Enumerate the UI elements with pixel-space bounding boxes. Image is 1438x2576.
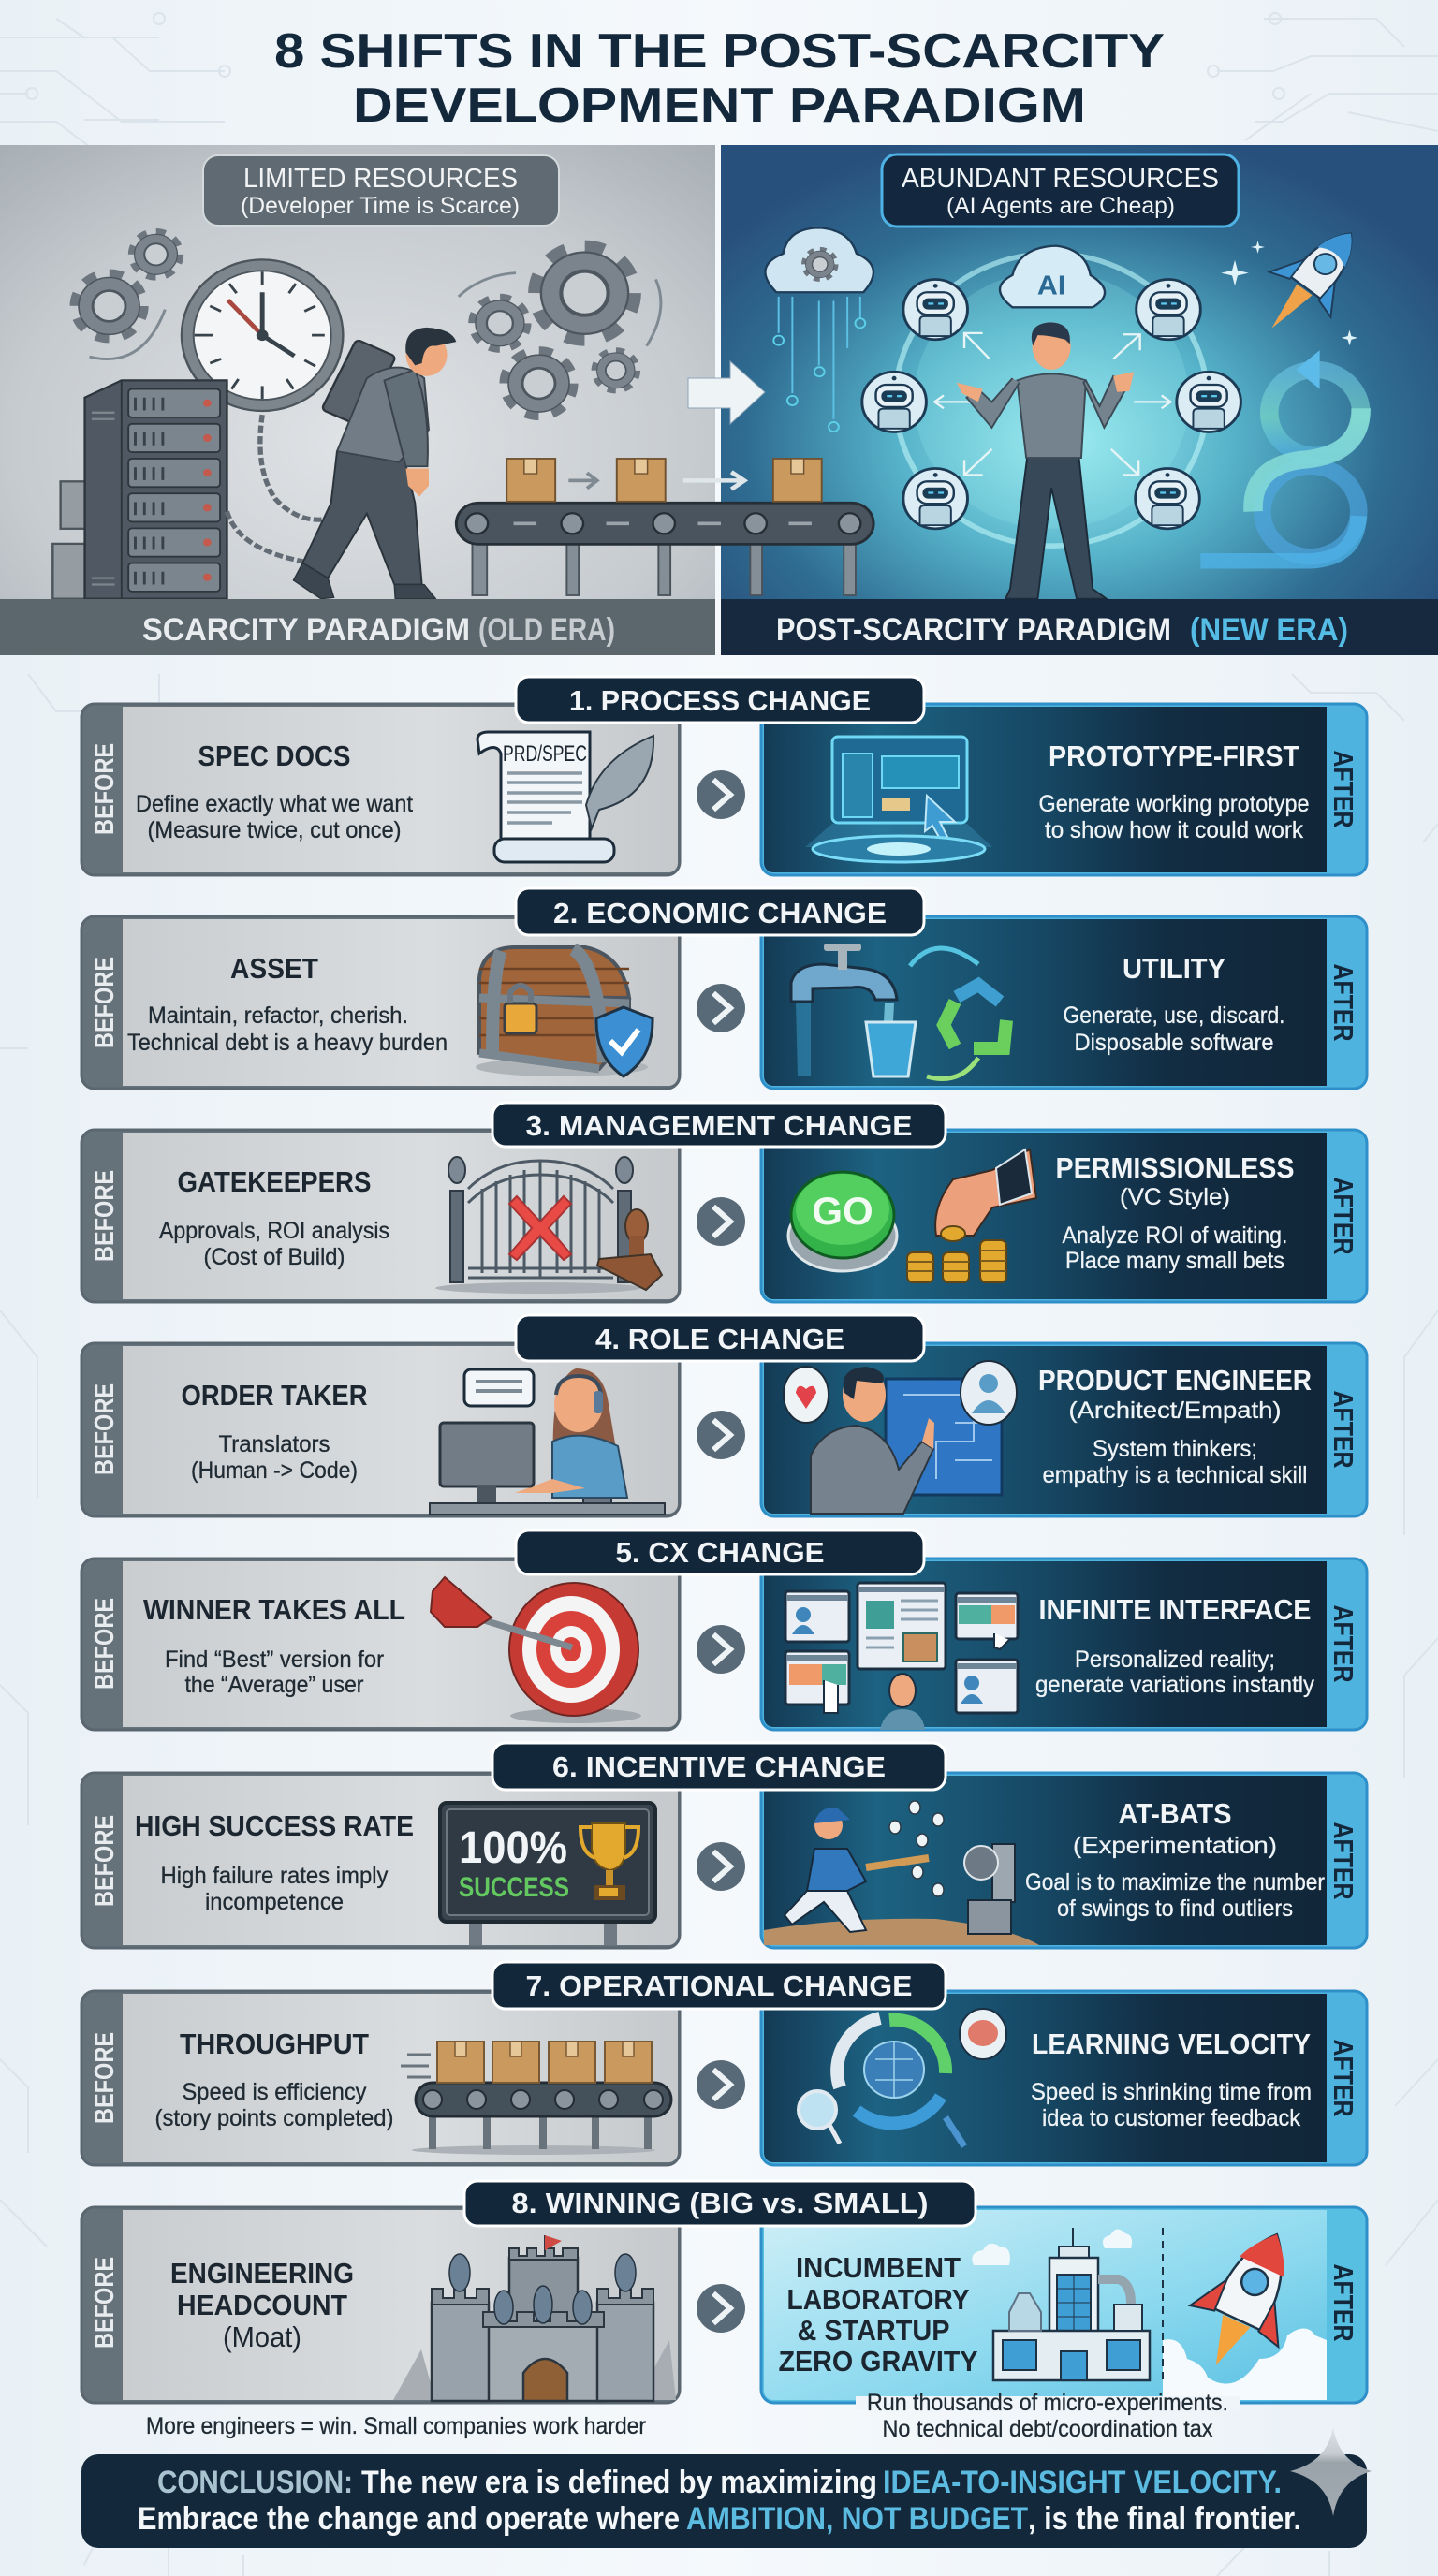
illustration: developer orchestrating AI agents	[765, 211, 1382, 599]
before card: high success rate: incompetence	[205, 1889, 344, 1915]
icon: faucet, glass and recycling	[791, 944, 1006, 1078]
after card: utility: AFTER	[1328, 964, 1357, 1042]
after card: product engineer	[761, 1343, 1367, 1516]
icon: personalized interface windows	[785, 1583, 1018, 1730]
arrow	[697, 1625, 745, 1674]
after card: learning velocity: Speed is shrinking time from	[1031, 2079, 1312, 2105]
before card: engineering headcount: (Moat)	[223, 2320, 301, 2353]
after card: infinite interface	[761, 1559, 1367, 1730]
before card: gatekeepers: BEFORE	[90, 1170, 120, 1262]
after card: incumbent laboratory and startup: AFTER	[1328, 2263, 1357, 2342]
before card: winner takes all: BEFORE	[90, 1598, 120, 1690]
shift 2: economic change	[81, 888, 1367, 1089]
icon: scroll and quill	[477, 732, 653, 862]
conclusion banner	[81, 2454, 1367, 2548]
shift 3: management change	[81, 1103, 1367, 1302]
after card: at-bats	[761, 1773, 1367, 1948]
panel: scarcity paradigm (old era)	[0, 145, 715, 655]
before card: spec docs: Define exactly what we want	[136, 791, 413, 817]
caption: after: No technical debt/coordination tax	[882, 2416, 1213, 2442]
before card: engineering headcount: ENGINEERING	[170, 2257, 354, 2290]
shift 5: cx change	[81, 1530, 1367, 1730]
chains	[260, 415, 381, 520]
before card: high success rate	[81, 1773, 680, 1948]
before card: winner takes all: Find “Best” version for	[165, 1647, 384, 1673]
before card: throughput: BEFORE	[90, 2032, 120, 2124]
after card: permissionless: (VC Style)	[1120, 1184, 1230, 1210]
arrow	[697, 984, 745, 1032]
before card: gatekeepers: Approvals, ROI analysis	[159, 1218, 389, 1244]
title	[274, 24, 1165, 133]
ring	[896, 254, 1208, 546]
heading: 6. INCENTIVE CHANGE	[552, 1750, 886, 1783]
heading	[492, 1962, 946, 2009]
footer band: post-scarcity paradigm	[721, 599, 1438, 655]
label: abundant resources	[882, 154, 1239, 227]
heading	[464, 2181, 976, 2226]
heading	[516, 677, 924, 723]
icon: scroll and quill: PRD/SPEC	[503, 741, 587, 767]
conclusion banner: Embrace the change and operate where	[138, 2501, 680, 2537]
developer	[1005, 458, 1107, 599]
after card: learning velocity: idea to customer feedback	[1042, 2105, 1300, 2131]
heading: 3. MANAGEMENT CHANGE	[526, 1109, 912, 1142]
before card: engineering headcount: BEFORE	[90, 2257, 120, 2349]
before card: spec docs: SPEC DOCS	[198, 739, 350, 772]
before card: spec docs: (Measure twice, cut once)	[148, 817, 401, 843]
label: limited resources	[203, 155, 559, 226]
label: abundant resources: ABUNDANT RESOURCES	[902, 164, 1219, 194]
before card: order taker: (Human -> Code)	[191, 1457, 358, 1484]
conclusion banner: CONCLUSION:	[157, 2465, 353, 2500]
before card: throughput	[81, 1991, 680, 2165]
after card: permissionless: PERMISSIONLESS	[1056, 1151, 1294, 1184]
sparkle mark	[1290, 2427, 1372, 2516]
before card: asset: BEFORE	[90, 957, 120, 1048]
after card: at-bats: AFTER	[1328, 1822, 1357, 1900]
after card: learning velocity	[761, 1991, 1367, 2165]
before card: high success rate: HIGH SUCCESS RATE	[135, 1809, 414, 1842]
heading	[516, 888, 924, 935]
after card: utility	[761, 916, 1367, 1089]
shift 7: operational change	[81, 1962, 1367, 2165]
after card: prototype-first: Generate working prototype	[1039, 791, 1309, 817]
before card: throughput: THROUGHPUT	[180, 2027, 369, 2060]
caption: before: More engineers = win. Small companies work harder	[146, 2413, 646, 2439]
before card: engineering headcount	[81, 2207, 680, 2403]
arrow	[697, 1842, 745, 1891]
footer band: scarcity paradigm: SCARCITY PARADIGM	[142, 612, 470, 648]
before card: spec docs: BEFORE	[90, 743, 120, 835]
icon: castle with soldiers	[393, 2235, 676, 2401]
heading	[516, 1315, 924, 1361]
before card: asset: Maintain, refactor, cherish.	[148, 1003, 408, 1029]
before card: gatekeepers: (Cost of Build)	[204, 1244, 345, 1270]
icon: dart in target	[431, 1577, 641, 1723]
heading: 1. PROCESS CHANGE	[569, 684, 871, 717]
icon: go button and coin bets: GO	[812, 1189, 873, 1233]
after card: prototype-first: to show how it could work	[1045, 817, 1303, 843]
after card: permissionless	[761, 1130, 1367, 1302]
label: limited resources: (Developer Time is Scarce)	[241, 193, 520, 219]
after card: at-bats: AT-BATS	[1118, 1797, 1232, 1830]
after card: incumbent laboratory and startup: ZERO GRAVITY	[779, 2345, 978, 2378]
icon: locked gate and stamp	[435, 1157, 662, 1294]
infinity loop	[1269, 370, 1361, 456]
after card: at-bats: Goal is to maximize the number	[1025, 1869, 1325, 1895]
after card: utility: UTILITY	[1123, 952, 1225, 985]
icon: scoreboard with trophy: 100%	[459, 1823, 567, 1873]
after card: permissionless: Analyze ROI of waiting.	[1062, 1222, 1288, 1249]
after card: at-bats: (Experimentation)	[1073, 1833, 1277, 1859]
shift 6: incentive change	[81, 1743, 1367, 1948]
conclusion banner: AMBITION, NOT BUDGET	[686, 2501, 1028, 2537]
after card: product engineer: System thinkers;	[1093, 1436, 1257, 1462]
arrow	[697, 770, 745, 819]
after card: incumbent laboratory and startup: LABORATORY	[786, 2283, 970, 2316]
icon: support agent at computer	[430, 1368, 665, 1515]
arrow	[697, 2060, 745, 2109]
after card: product engineer: (Architect/Empath)	[1069, 1398, 1281, 1424]
before card: order taker: Translators	[219, 1431, 330, 1457]
title: 8 SHIFTS IN THE POST-SCARCITY	[274, 24, 1165, 79]
before card: winner takes all	[81, 1559, 680, 1730]
before card: asset: Technical debt is a heavy burden	[127, 1030, 448, 1056]
before card: engineering headcount: HEADCOUNT	[177, 2289, 347, 2321]
after card: utility: Generate, use, discard.	[1064, 1003, 1284, 1029]
footer band: post-scarcity paradigm: (NEW ERA)	[1190, 612, 1348, 648]
icon: go button and coin bets	[788, 1149, 1036, 1282]
footer band: scarcity paradigm: (OLD ERA)	[478, 612, 615, 648]
after card: product engineer: AFTER	[1328, 1391, 1357, 1469]
conveyor belt crossing both panels	[456, 459, 873, 595]
icon: scoreboard with trophy: SUCCESS	[459, 1872, 569, 1903]
heading: 4. ROLE CHANGE	[595, 1323, 844, 1355]
developer figure	[321, 339, 396, 427]
icon: baseball batter and pitching machine	[764, 1801, 1039, 1945]
conclusion banner: , is the final frontier.	[1028, 2501, 1301, 2537]
icon: product engineer with blueprint	[784, 1361, 1017, 1514]
label: abundant resources: (AI Agents are Cheap)	[946, 193, 1175, 219]
shift 1: process change	[81, 677, 1367, 875]
after card: permissionless: Place many small bets	[1065, 1248, 1284, 1274]
heading: 2. ECONOMIC CHANGE	[553, 897, 887, 929]
icon: building, rocket and clouds	[972, 2214, 1327, 2400]
heading: 5. CX CHANGE	[616, 1536, 824, 1569]
after card: prototype-first	[761, 704, 1367, 875]
illustration: developer orchestrating AI agents: AI	[1037, 271, 1065, 300]
after card: infinite interface: INFINITE INTERFACE	[1039, 1593, 1311, 1626]
icon: conveyor with boxes	[401, 2042, 671, 2155]
arrow	[697, 1197, 745, 1246]
after card: prototype-first: AFTER	[1328, 751, 1357, 828]
footer band: scarcity paradigm	[0, 599, 715, 655]
illustration: overworked developer chained to clock and server	[52, 232, 661, 599]
heading: 8. WINNING (BIG vs. SMALL)	[511, 2187, 929, 2219]
after card: product engineer: PRODUCT ENGINEER	[1038, 1364, 1312, 1397]
before card: spec docs	[81, 704, 680, 875]
panel: post-scarcity paradigm (new era)	[721, 145, 1438, 655]
arrow: old era to new era	[688, 361, 765, 424]
before card: throughput: (story points completed)	[155, 2105, 393, 2131]
after card: infinite interface: Personalized reality;	[1075, 1647, 1275, 1673]
icon: treasure chest with shield	[476, 947, 653, 1076]
AI cloud	[1000, 246, 1105, 307]
after card: product engineer: empathy is a technical skill	[1043, 1462, 1307, 1488]
after card: incumbent laboratory and startup	[761, 2207, 1367, 2403]
footer band: post-scarcity paradigm: POST-SCARCITY PARADIGM	[776, 612, 1171, 648]
before card: high success rate: High failure rates imply	[161, 1863, 389, 1889]
after card: infinite interface: AFTER	[1328, 1604, 1357, 1683]
before card: winner takes all: the “Average” user	[185, 1672, 363, 1698]
rocket	[1241, 211, 1382, 351]
after card: at-bats: of swings to find outliers	[1057, 1895, 1293, 1922]
after card: prototype-first: PROTOTYPE-FIRST	[1049, 739, 1299, 772]
icon: learning cycle with brain	[799, 2009, 1006, 2146]
before card: order taker: BEFORE	[90, 1383, 120, 1475]
shift 4: role change	[81, 1315, 1367, 1516]
small stacks	[61, 481, 86, 529]
after card: learning velocity: AFTER	[1328, 2039, 1357, 2117]
before card: asset	[81, 916, 680, 1089]
icon: holographic prototype	[805, 737, 992, 862]
after card: permissionless: AFTER	[1328, 1178, 1357, 1255]
after card: incumbent laboratory and startup: & STARTUP	[798, 2314, 949, 2347]
before card: high success rate: BEFORE	[90, 1815, 120, 1907]
before card: winner takes all: WINNER TAKES ALL	[143, 1593, 405, 1626]
conclusion banner: The new era is defined by maximizing	[361, 2465, 877, 2500]
after card: incumbent laboratory and startup: INCUMBENT	[796, 2251, 961, 2284]
icon: scoreboard with trophy	[440, 1803, 655, 1945]
after card: infinite interface: generate variations instantly	[1035, 1672, 1314, 1698]
title: DEVELOPMENT PARADIGM	[353, 79, 1086, 133]
heading: 7. OPERATIONAL CHANGE	[526, 1969, 912, 2002]
caption: after: Run thousands of micro-experiments.	[867, 2390, 1228, 2416]
arrow	[697, 2284, 745, 2333]
before card: gatekeepers	[81, 1130, 680, 1302]
arrow	[697, 1411, 745, 1459]
before card: gatekeepers: GATEKEEPERS	[178, 1165, 371, 1198]
cloud gear	[765, 227, 873, 292]
before card: order taker: ORDER TAKER	[182, 1379, 367, 1412]
heading	[516, 1530, 924, 1574]
before card: asset: ASSET	[230, 952, 318, 985]
after card: utility: Disposable software	[1075, 1030, 1273, 1056]
heading	[492, 1743, 946, 1790]
after card: learning velocity: LEARNING VELOCITY	[1032, 2027, 1311, 2060]
label: limited resources: LIMITED RESOURCES	[243, 164, 518, 194]
conclusion banner: IDEA-TO-INSIGHT VELOCITY.	[883, 2465, 1282, 2500]
before card: throughput: Speed is efficiency	[182, 2079, 367, 2105]
caption: after	[856, 2390, 1240, 2442]
shift 8: winning (big vs. small)	[81, 2181, 1367, 2442]
before card: order taker	[81, 1343, 680, 1516]
heading	[492, 1103, 946, 1147]
